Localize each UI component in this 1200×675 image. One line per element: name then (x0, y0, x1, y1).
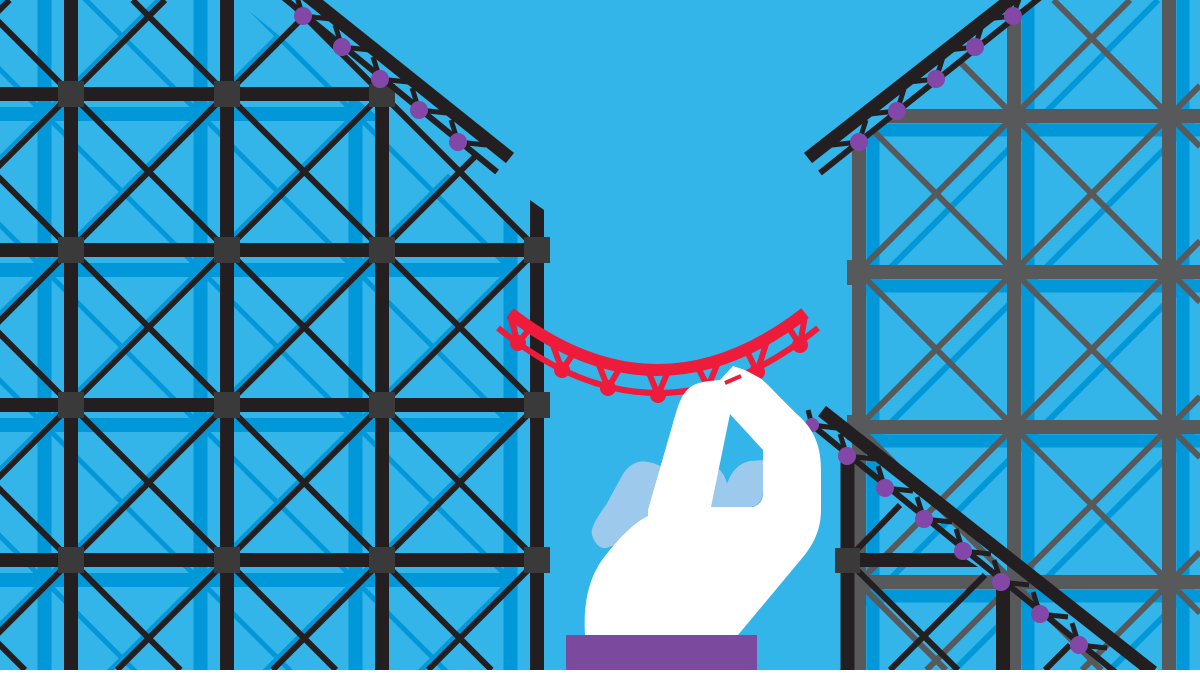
top left roller coaster track (262, 0, 510, 172)
top right roller coaster track (808, 0, 1042, 173)
red strip pinched between fingers (725, 376, 741, 383)
left structure shadow (0, 0, 518, 670)
right structure shadow (866, 0, 1200, 670)
left black scaffold structure (0, 0, 550, 670)
back fingers of hand (592, 460, 763, 548)
purple hand base (566, 635, 757, 671)
white hand (585, 366, 821, 635)
bottom white edge (0, 670, 1200, 675)
lower right roller coaster track (805, 410, 1153, 672)
lower right black scaffold (835, 456, 1070, 672)
scaffold joint nodes (58, 81, 550, 573)
right grey scaffold structure (847, 0, 1200, 670)
red track piece held by hand (498, 313, 818, 403)
